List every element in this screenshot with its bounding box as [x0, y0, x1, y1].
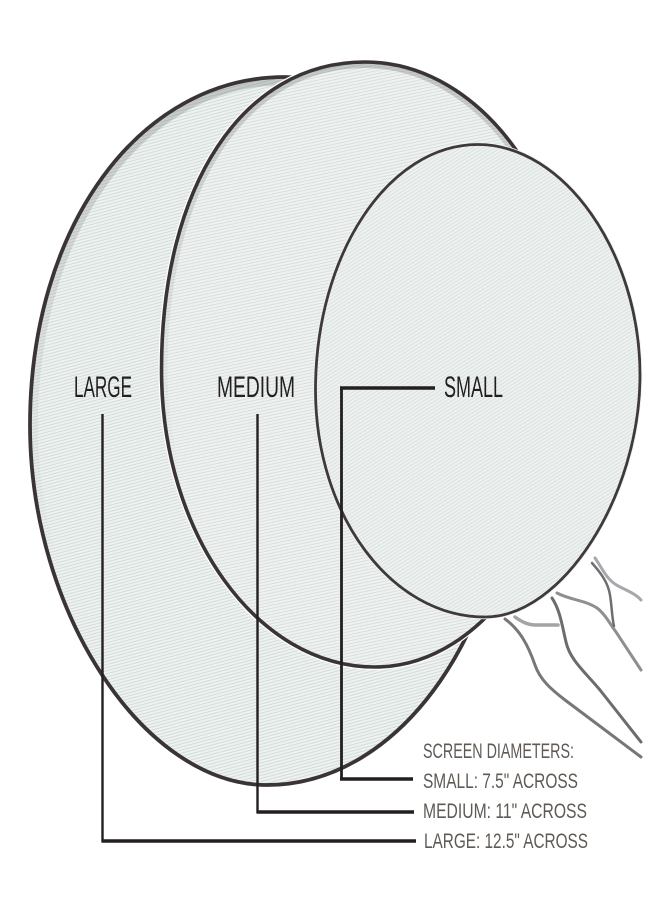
- wire: short light: [515, 617, 558, 625]
- wire: outer left: [505, 619, 641, 757]
- wire: fourth: [592, 563, 614, 626]
- leader line: medium: [256, 414, 414, 813]
- label: large: LARGE: [74, 371, 132, 404]
- leader line: large: [102, 414, 416, 842]
- legend: large size: LARGE: 12.5" ACROSS: [424, 830, 588, 853]
- legend heading: SCREEN DIAMETERS:: [423, 740, 574, 763]
- label: medium: MEDIUM: [217, 371, 295, 404]
- leader line: small: [340, 387, 435, 780]
- legend: small size: SMALL: 7.5" ACROSS: [423, 770, 578, 793]
- wire: top light: [595, 558, 641, 600]
- legend: screen diameters: [423, 740, 588, 853]
- screen: small: [316, 144, 640, 617]
- screen: large: [30, 77, 512, 785]
- label: small: SMALL: [444, 371, 503, 404]
- screen: medium: [158, 60, 518, 670]
- legend: medium size: MEDIUM: 11" ACROSS: [423, 800, 587, 823]
- handle wires: [505, 558, 641, 757]
- wire: third: [557, 593, 641, 670]
- wire: second: [552, 598, 641, 742]
